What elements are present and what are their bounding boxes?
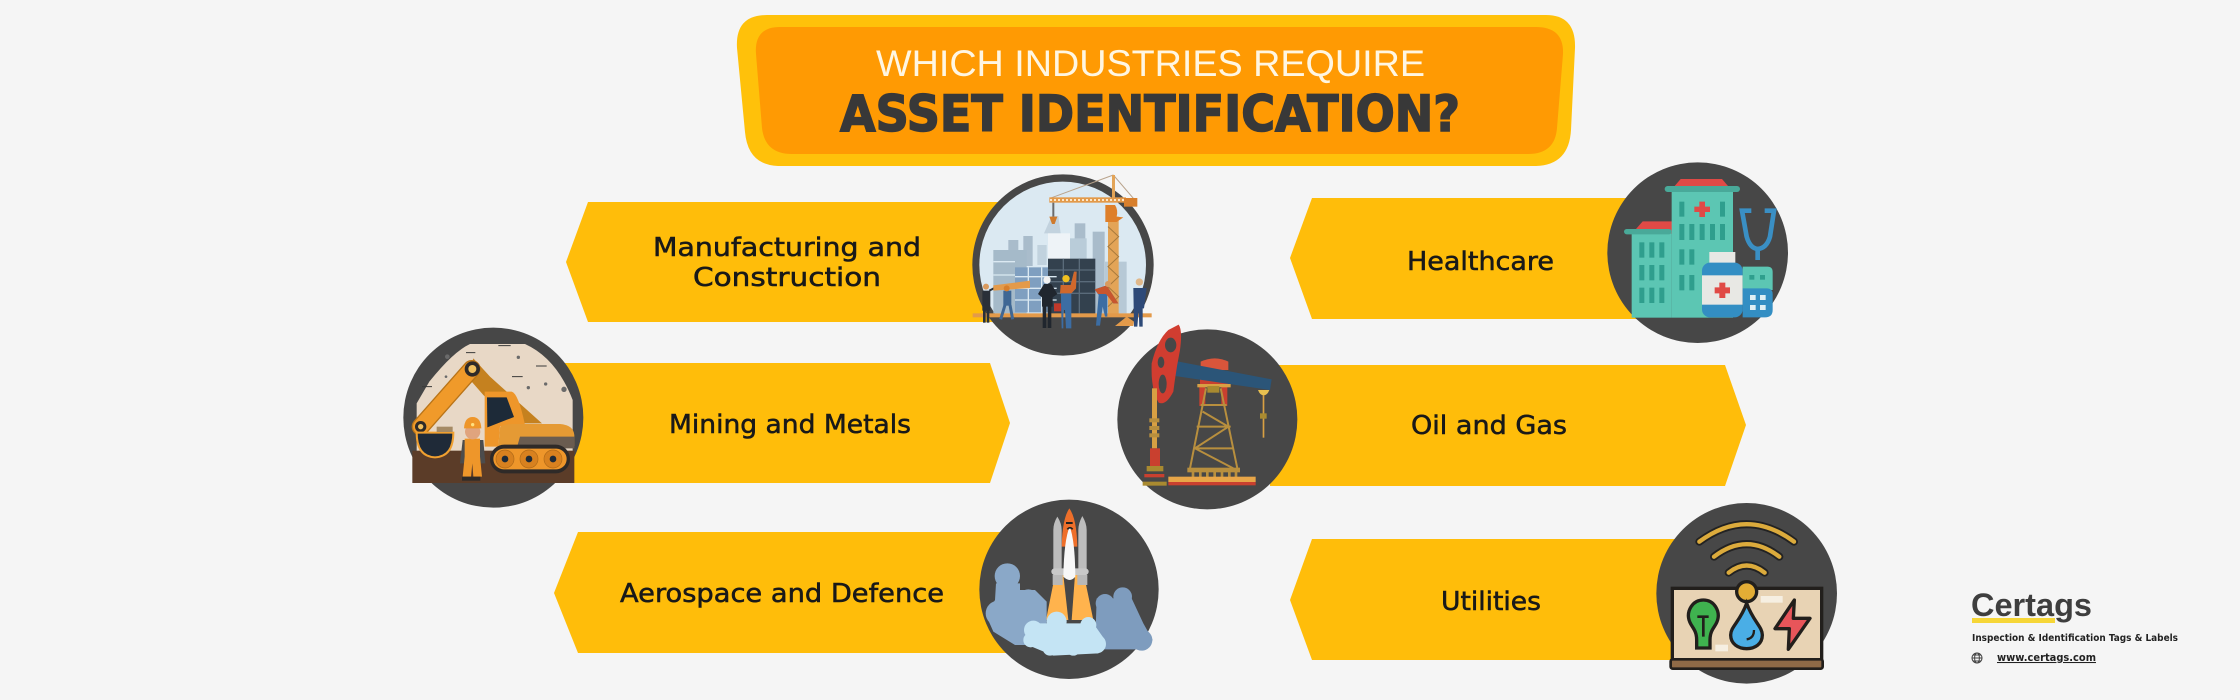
ribbon: [554, 532, 1030, 653]
lightning: [1775, 600, 1810, 649]
stethoscope: [1742, 211, 1774, 260]
pill bottle: [1709, 252, 1735, 264]
icon: utility meter: [1656, 503, 1837, 684]
panel: utilities: [1290, 503, 1837, 684]
panel: mining and metals: [403, 328, 1010, 508]
ribbon: [566, 202, 1030, 322]
horse head: [1152, 325, 1181, 403]
label: Utilities: [1441, 587, 1541, 617]
icon: excavator: [403, 328, 583, 508]
label: Mining and Metals: [669, 410, 911, 440]
label: Construction: [693, 263, 881, 293]
icon: rocket launch: [979, 500, 1159, 679]
logo block: [1971, 587, 2178, 664]
panel: oil and gas: [1117, 325, 1746, 509]
miner: [460, 417, 485, 481]
wifi arcs: [1699, 524, 1794, 573]
panel: healthcare: [1290, 162, 1788, 343]
title line 2: ASSET IDENTIFICATION?: [840, 85, 1460, 143]
rocket: [1062, 508, 1077, 547]
panel: aerospace and defence: [554, 500, 1159, 679]
brand name: Certags: [1971, 587, 2092, 623]
brand underline: [1972, 618, 2055, 623]
ribbon: [1290, 539, 1690, 660]
tagline: Inspection & Identification Tags & Labels: [1972, 633, 2178, 644]
ribbon: [1270, 365, 1746, 486]
title banner: [737, 15, 1575, 166]
icon: globe: [1972, 653, 1982, 663]
polished rod: [1258, 390, 1269, 395]
smoke clouds: [986, 563, 1047, 645]
icon: construction site: [972, 174, 1154, 356]
bulb: [1688, 600, 1718, 648]
flames: [1046, 575, 1068, 620]
workers: [982, 272, 1147, 328]
label: Aerospace and Defence: [620, 579, 944, 609]
label: Oil and Gas: [1411, 411, 1567, 441]
crane: [1049, 175, 1137, 314]
title line 1: WHICH INDUSTRIES REQUIRE: [876, 43, 1425, 84]
board: [1672, 588, 1822, 660]
ribbon: [1290, 198, 1680, 319]
derrick: [1190, 388, 1237, 468]
first aid kit: [1743, 267, 1773, 290]
label: Healthcare: [1407, 247, 1554, 277]
ribbon: [560, 363, 1010, 483]
panel: manufacturing and construction: [566, 174, 1154, 356]
water drop: [1731, 603, 1762, 649]
label: Manufacturing and: [653, 233, 921, 263]
icon: pumpjack: [1117, 325, 1297, 509]
icon: hospital: [1607, 162, 1788, 343]
ground strip: [973, 313, 1152, 317]
website: www.certags.com: [1997, 652, 2096, 664]
infographic canvas: [403, 15, 2178, 684]
